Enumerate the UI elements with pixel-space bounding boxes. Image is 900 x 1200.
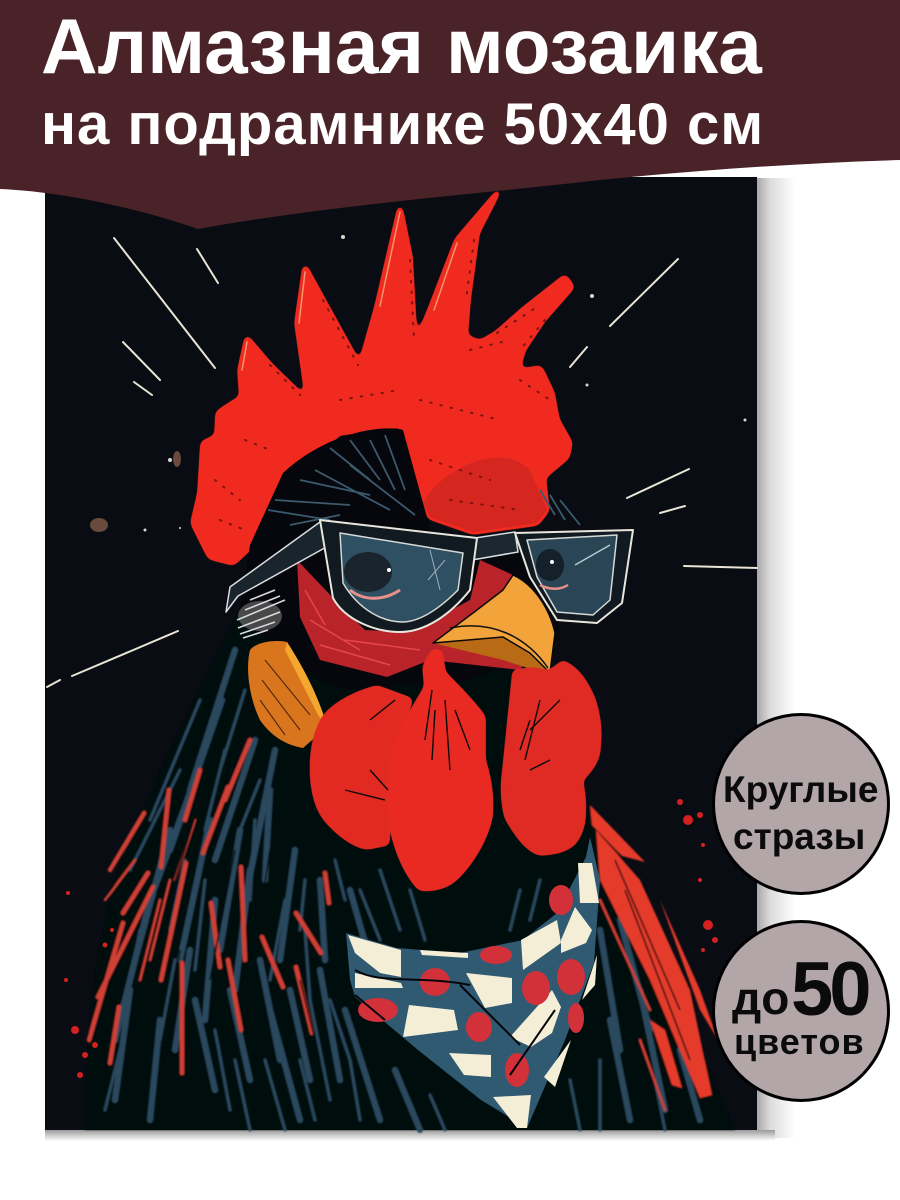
badge text: up to: до xyxy=(732,972,789,1024)
bandana xyxy=(346,837,600,1128)
face xyxy=(297,560,540,677)
canvas bottom shadow xyxy=(45,1130,775,1141)
bandana red dots xyxy=(358,885,585,1087)
stars and dust xyxy=(144,235,746,1102)
banner xyxy=(0,0,900,229)
red splatter xyxy=(64,799,718,1078)
comb base shading xyxy=(423,458,547,532)
badge text line 1: Круглые xyxy=(723,769,878,810)
badge: up to 50 colours xyxy=(712,920,890,1102)
badge number: 50 xyxy=(791,947,868,1032)
canvas background xyxy=(45,177,757,1130)
right eye xyxy=(536,545,610,589)
head feathers xyxy=(268,435,580,525)
glasses xyxy=(226,520,633,632)
ear lobe xyxy=(248,641,327,748)
badge: round rhinestones xyxy=(712,713,890,895)
white ear tuft xyxy=(237,590,285,638)
head xyxy=(240,428,580,690)
beak xyxy=(433,575,555,673)
badge circle xyxy=(712,713,890,895)
comb highlights and speckles xyxy=(215,212,550,530)
canvas side shadow xyxy=(757,178,795,1138)
badge circle xyxy=(712,920,890,1102)
subheading: на подрамнике 50х40 см xyxy=(41,92,764,157)
bandana cream patches xyxy=(348,863,599,1128)
black plumage xyxy=(85,600,735,1130)
wattle folds xyxy=(345,690,560,800)
bridge xyxy=(472,532,518,560)
red feathers xyxy=(89,740,665,1110)
wattles xyxy=(313,652,599,889)
bandana folds xyxy=(355,970,555,1075)
right red feathers xyxy=(590,805,718,1098)
comb xyxy=(193,192,572,563)
right lens xyxy=(515,530,633,623)
badge text line 2: стразы xyxy=(733,816,865,857)
heading: Алмазная мозаика xyxy=(41,2,762,90)
left lens xyxy=(320,520,477,632)
badge text: colours: цветов xyxy=(734,1021,865,1062)
left eye xyxy=(344,550,445,598)
stains xyxy=(90,451,181,532)
blue feathers xyxy=(105,650,700,1130)
black feather separators xyxy=(160,800,690,1060)
rays xyxy=(47,238,757,687)
temple arm xyxy=(226,522,330,612)
